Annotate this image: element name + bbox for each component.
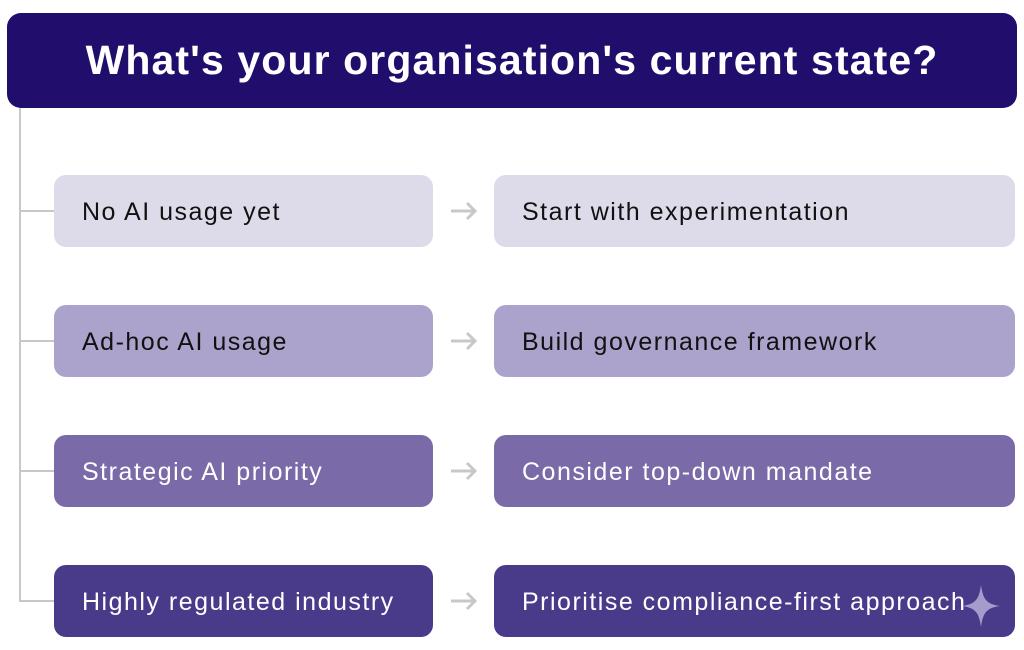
- row 1 state: No AI usage yet: [82, 198, 281, 226]
- arrow 4: [451, 592, 477, 610]
- icon: sparkle: [962, 586, 1000, 626]
- row 2 action: [494, 305, 1015, 377]
- title: What's your organisation's current state?: [86, 37, 938, 83]
- arrow 1: [451, 202, 477, 220]
- arrow 2: [451, 332, 477, 350]
- row 4 action: [494, 565, 1015, 637]
- connector line: [19, 108, 21, 601]
- row 2 action: Build governance framework: [522, 328, 878, 356]
- row 3 action: [494, 435, 1015, 507]
- row 4 action: Prioritise compliance-first approach: [522, 588, 966, 616]
- row 3 state: Strategic AI priority: [82, 458, 323, 486]
- row 4 state: [54, 565, 433, 637]
- row 1 action: [494, 175, 1015, 247]
- arrow 3: [451, 462, 477, 480]
- row 2 state: Ad-hoc AI usage: [82, 328, 288, 356]
- row 1 state: [54, 175, 433, 247]
- row 3 state: [54, 435, 433, 507]
- title: [7, 13, 1017, 108]
- row 3 action: Consider top-down mandate: [522, 458, 874, 486]
- row 1 action: Start with experimentation: [522, 198, 850, 226]
- row 4 state: Highly regulated industry: [82, 588, 395, 616]
- row 2 state: [54, 305, 433, 377]
